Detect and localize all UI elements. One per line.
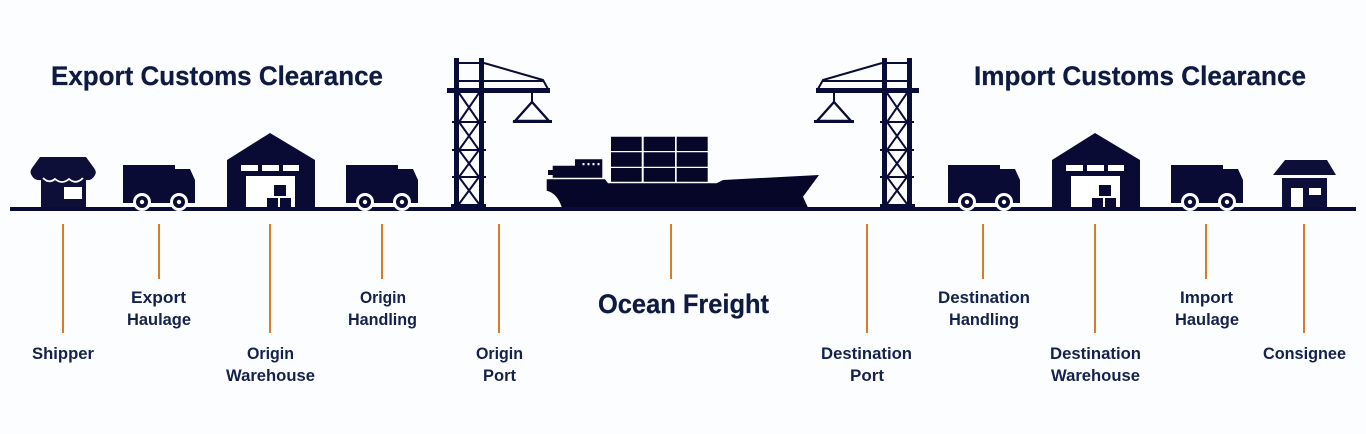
- label: destination handling: [938, 288, 1030, 329]
- icon: origin port crane: [447, 58, 552, 209]
- label: origin port: [476, 344, 523, 385]
- icon: consignee house: [1273, 160, 1336, 207]
- label: export haulage: [127, 288, 191, 329]
- icon: destination warehouse: [1052, 133, 1140, 207]
- label: destination warehouse: Destination: [1050, 344, 1141, 363]
- label: export haulage: Haulage: [127, 310, 191, 329]
- heading: import customs clearance: Import Customs Clearance: [974, 61, 1306, 91]
- label: destination port: [821, 344, 912, 385]
- icon: shipper shop: [30, 157, 96, 207]
- label: shipper: Shipper: [32, 344, 94, 363]
- label: destination handling: Handling: [949, 310, 1019, 329]
- icon: origin warehouse: [227, 133, 315, 207]
- label: ocean freight: Ocean Freight: [598, 289, 769, 319]
- label: origin port: Origin: [476, 344, 523, 363]
- label: destination warehouse: [1050, 344, 1141, 385]
- label: origin handling: [348, 288, 417, 329]
- label: import haulage: Import: [1180, 288, 1233, 307]
- label: origin warehouse: [226, 344, 315, 385]
- icon: destination port crane: [814, 58, 919, 209]
- icon: container ship: [547, 137, 819, 207]
- icon: import haulage truck: [1171, 165, 1243, 211]
- label: destination warehouse: Warehouse: [1051, 366, 1140, 385]
- icon: export haulage truck: [123, 165, 195, 211]
- label: consignee: Consignee: [1263, 344, 1346, 363]
- icon: origin handling truck: [346, 165, 418, 211]
- label: destination handling: Destination: [938, 288, 1030, 307]
- label: destination port: Port: [850, 366, 884, 385]
- ground line: [10, 207, 1356, 211]
- label: origin warehouse: Warehouse: [226, 366, 315, 385]
- label: origin warehouse: Origin: [247, 344, 294, 363]
- label: origin handling: Origin: [360, 288, 406, 307]
- label: export haulage: Export: [131, 288, 186, 307]
- orange connector lines: [63, 224, 1304, 333]
- heading: export customs clearance: Export Customs Clearance: [51, 61, 383, 91]
- icon: destination handling truck: [948, 165, 1020, 211]
- label: origin port: Port: [483, 366, 516, 385]
- label: import haulage: [1175, 288, 1239, 329]
- label: origin handling: Handling: [348, 310, 417, 329]
- label: destination port: Destination: [821, 344, 912, 363]
- label: import haulage: Haulage: [1175, 310, 1239, 329]
